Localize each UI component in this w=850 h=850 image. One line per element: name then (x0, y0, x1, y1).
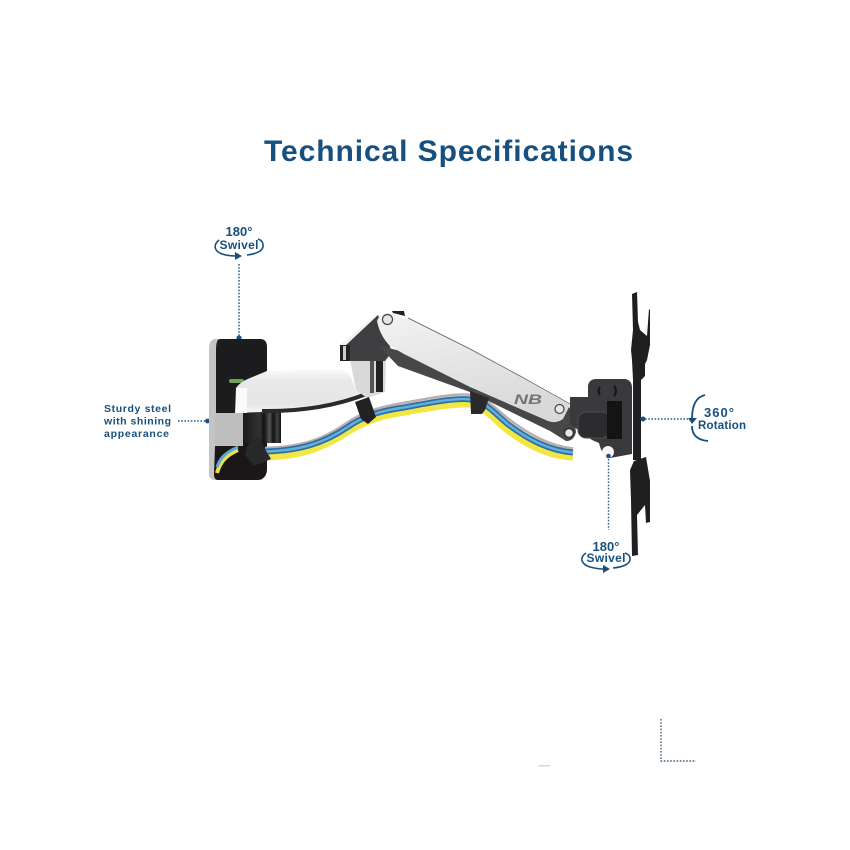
screw: top (382, 314, 392, 324)
lower arm: chrome (235, 360, 386, 413)
callout: top 180 degree swivel (215, 224, 263, 341)
swivel bracket (570, 379, 632, 458)
top VESA arm (631, 292, 650, 460)
dotted corner mark (661, 719, 696, 761)
screw: lower front (555, 404, 564, 414)
swivel pin (602, 446, 614, 458)
callout: 360 rotation: 360° (704, 405, 734, 420)
elbow (340, 315, 392, 361)
faint speck (539, 765, 550, 766)
wall plate (209, 339, 267, 480)
callout: sturdy steel (103, 403, 210, 440)
lower black cover (214, 436, 267, 480)
silver cover (377, 313, 570, 422)
callout: bottom 180 degree swivel (582, 454, 630, 573)
screw: lower rear (564, 428, 574, 438)
mounting plate (630, 292, 650, 556)
cable bundle (217, 395, 573, 473)
callout: bottom 180 degree swivel: Swivel (586, 551, 626, 565)
callout: 360 rotation: Rotation (698, 420, 746, 432)
callout: 360 rotation (640, 395, 746, 441)
callout: bottom 180 degree swivel: 180° (593, 539, 619, 554)
cable clip: lower arm (355, 397, 376, 424)
cable clip: wall end (245, 436, 271, 466)
cable clip: upper arm (470, 391, 489, 414)
dark underside (378, 345, 576, 441)
upper black cover (216, 339, 267, 413)
title: Technical Specifications (264, 135, 633, 168)
green indicator (229, 379, 244, 383)
logo: NB (514, 391, 542, 407)
callout: top 180 degree swivel: Swivel (220, 238, 258, 252)
callout: sturdy steel: appearance (104, 428, 169, 440)
callout: sturdy steel: with shining (103, 416, 171, 428)
bottom VESA arm (630, 457, 650, 556)
callout: sturdy steel: Sturdy steel (104, 403, 171, 415)
hinge columns (243, 412, 281, 443)
upper gas-spring arm (377, 311, 576, 441)
callout: top 180 degree swivel: 180° (226, 224, 252, 239)
